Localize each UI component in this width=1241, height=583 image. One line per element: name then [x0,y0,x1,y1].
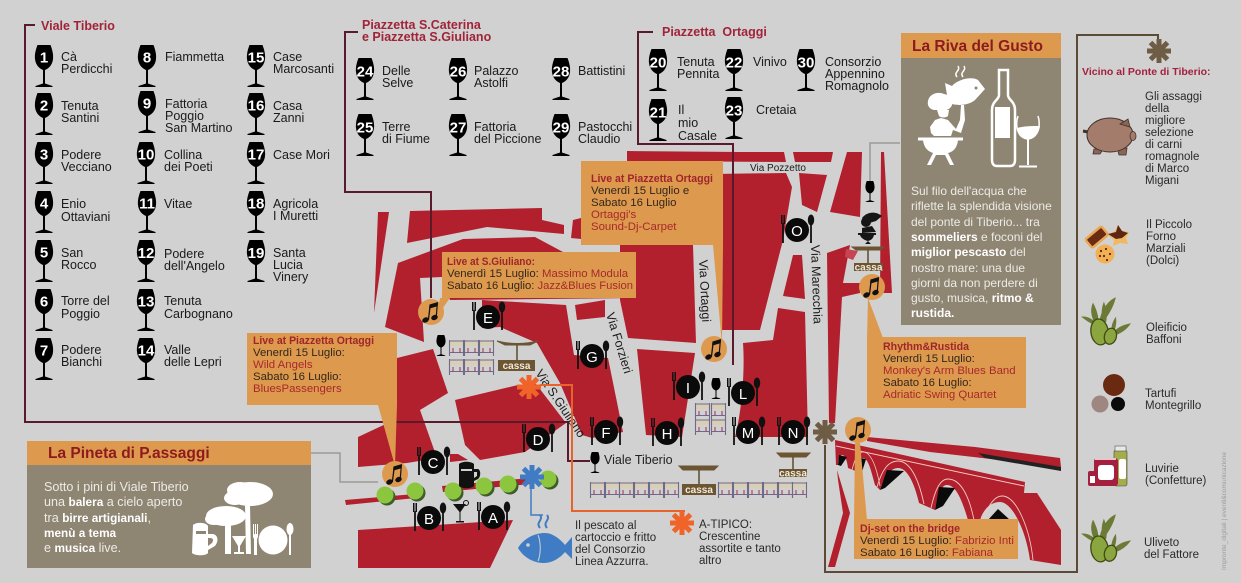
text: Uliveto del Fattore [1144,537,1199,561]
text: Il pescato al cartoccio: Il pescato al [575,520,636,532]
wine list: Viale Tiberio: Podere [61,148,101,162]
callout: Live at S.Giuliano [437,252,636,316]
callout: Live at Piazzetta Ortaggi top: Sound-Dj-Carpet [591,221,677,233]
wine list: Viale Tiberio: I Muretti [273,209,318,223]
wine list: Viale Tiberio: 18 [248,196,264,212]
wine list: Piazzetta Ortaggi [649,49,889,143]
icon: fish with steam [518,515,572,563]
callout: Dj-set on the bridge [854,443,1018,559]
wine list: Viale Tiberio: Torre del [61,294,110,308]
wine list: Viale Tiberio: Enio [61,197,86,211]
restaurant marker E [472,302,505,330]
music icon S.Giuliano [418,299,444,325]
cassa Viale Tiberio: cassa [685,485,713,496]
text: Oleificio Baffoni: Oleificio [1146,322,1187,334]
wine list: Piazzetta S.Caterina: 28 [553,64,569,80]
street label: Via S.Giuliano: Via S.Giuliano [533,367,588,440]
music icon bridge [845,417,871,443]
text: Il pescato al cartoccio: cartoccio e fritto [575,532,656,544]
restaurant marker M [732,416,765,445]
callout: Live at Piazzetta Ortaggi left: Venerdì 15 Luglio: [253,347,345,359]
text: Il Piccolo Forno [1146,219,1192,267]
wine list: Viale Tiberio: 6 [40,294,48,310]
text: Il Piccolo Forno: Marziali [1146,243,1186,255]
text: Tartufi Montegrillo: Tartufi [1145,388,1176,400]
wine list: Piazzetta Ortaggi: Consorzio [825,55,881,69]
wine list: Viale Tiberio: Santini [61,111,99,125]
wine list: Viale Tiberio: Casa [273,99,302,113]
text: A-TIPICO: Crescentine [699,531,760,543]
text: La Riva description: rustida. [911,306,954,320]
wine list: Viale Tiberio: Marcosanti [273,62,334,76]
text: A-TIPICO: A-TIPICO: [699,519,752,531]
text: Uliveto del Fattore: del Fattore [1144,549,1199,561]
icon: star top right [1147,39,1171,63]
icon: blue star [520,465,544,489]
wine list: Viale Tiberio: 8 [143,50,151,66]
text: Oleificio Baffoni [1146,322,1187,346]
text: Pineta description [44,480,189,555]
restaurant marker F: F [601,425,611,442]
wine list: Viale Tiberio: Tenuta [164,294,202,308]
icon: pines, beer, plate [192,482,294,555]
brown bracket: Vicino al Ponte [825,35,1158,572]
connector: La Pineta to map [311,453,378,482]
cassa near E: cassa [503,361,531,372]
icon: olives [1081,297,1131,346]
small wine glass Viale Tiberio [590,452,600,473]
wine list: Viale Tiberio: Podere [164,247,204,261]
wine list: Viale Tiberio: Ottaviani [61,210,110,224]
callout: Live at Piazzetta Ortaggi top: Sabato 16 Luglio [591,197,677,209]
wine list: Piazzetta S.Caterina: Pastocchi [578,120,632,134]
wine list: Piazzetta Ortaggi: 20 [650,54,666,72]
text: Pineta description: e musica live. [44,541,121,555]
text: La Riva description [911,184,1052,320]
wine list: Viale Tiberio: dell'Angelo [164,259,225,273]
street label: Via Forzieri: Via Forzieri [603,311,635,375]
callout: Dj-set on the bridge: Dj-set on the bridge [860,523,960,535]
wine list: Viale Tiberio: Tenuta [61,99,99,113]
wine list: Piazzetta Ortaggi: Pennita [677,67,719,81]
wine list: Piazzetta S.Caterina: Palazzo [474,64,519,78]
heading: Piazzetta S.Caterina bracket: e Piazzetta S.Giuliano [362,30,492,44]
restaurant marker L [728,378,760,406]
restaurant marker D [522,424,555,452]
wine list: Piazzetta S.Caterina [356,58,632,156]
restaurant marker G [576,340,609,369]
text: Il Piccolo Forno: (Dolci) [1146,255,1179,267]
text: Migani: selezione [1145,127,1194,139]
connector: blue line to fish [531,487,543,515]
wine list: Viale Tiberio: 10 [138,146,154,164]
text: La Riva description: nostro mare: una due [911,261,1025,275]
wine list: Piazzetta Ortaggi: 21 [650,104,666,122]
heading: Piazzetta Ortaggi bracket: Piazzetta Ortaggi [662,25,767,39]
text: Il pescato al cartoccio: del Consorzio [575,544,645,556]
street label: Via Pozzetto: Via Pozzetto [750,163,806,174]
music icon Ortaggi [701,336,727,362]
text: A-TIPICO: altro [699,555,721,567]
wine list: Viale Tiberio: Agricola [273,197,318,211]
callout: Live at Piazzetta Ortaggi top: Ortaggi's [591,209,637,221]
restaurant marker B: B [424,511,434,528]
wine list: Viale Tiberio: Case Mori [273,148,330,162]
callout: Live at Piazzetta Ortaggi left: BluesPassengers [253,383,342,395]
wine list: Viale Tiberio: Poggio [165,109,204,123]
restaurant marker H: H [662,426,672,443]
wine list: Piazzetta Ortaggi: 23 [726,102,742,120]
wine list: Viale Tiberio: Zanni [273,111,304,125]
heading: Piazzetta S.Caterina bracket [345,18,492,298]
small wine glass E [436,335,446,356]
wine list: Viale Tiberio: Poggio [61,307,100,321]
wine list: Piazzetta S.Caterina: del Piccione [474,132,541,146]
callout: Live at S.Giuliano: Venerdì 15 Luglio: Massimo Modula [447,268,629,280]
text: La Riva description: gusto, musica, ritmo & [911,291,1034,305]
callout: Live at Piazzetta Ortaggi top: Live at Piazzetta Ortaggi [591,173,713,185]
restaurant marker A: A [488,510,498,527]
street label: Via Ortaggi: Via Ortaggi [696,259,713,322]
text: La Riva description: sommeliers e foconi del [911,230,1042,244]
text: Tartufi Montegrillo [1145,388,1201,412]
wine list: Viale Tiberio: 3 [40,146,48,164]
callout: Live at Piazzetta Ortaggi left: Live at Piazzetta Ortaggi [253,335,374,347]
text: Pineta description: tra birre artigianali, [44,511,151,525]
text: La Riva description: miglior pescasto del [911,245,1026,259]
wine list: Piazzetta Ortaggi: 22 [726,54,742,72]
wine list: Piazzetta S.Caterina: 27 [450,120,466,136]
wine list: Viale Tiberio: Collina [164,148,202,162]
wine list: Viale Tiberio: Rocco [61,258,96,272]
wine list: Viale Tiberio: 17 [248,146,264,164]
cassa Viale Tiberio [679,466,718,496]
restaurant marker I [672,372,705,400]
text: Migani: migliore [1145,115,1185,127]
wine list: Piazzetta S.Caterina: 25 [357,120,373,136]
callout: Live at Piazzetta Ortaggi left: Sabato 16 Luglio: [253,371,342,383]
text: Pineta description: menù a tema [44,526,117,540]
restaurant marker C: C [428,455,439,472]
text: Migani [1145,91,1202,187]
wine list: Viale Tiberio: 13 [138,294,154,310]
text: Migani: romagnole [1145,151,1199,163]
text: Migani: di Marco [1145,163,1189,175]
wine list: Piazzetta S.Caterina: di Fiume [382,132,430,146]
connector: La Riva to map [870,143,900,182]
callout: Live at Piazzetta Ortaggi left [247,333,397,466]
wine list: Viale Tiberio: 9 [143,96,151,112]
wine list: Viale Tiberio: Carbognano [164,307,233,321]
cassa near E [497,341,538,372]
street map [345,151,892,568]
wine list: Piazzetta Ortaggi: Romagnolo [825,79,889,93]
icon: martini glass [453,500,468,522]
text: Pineta description: una balera a cielo aperto [44,495,182,509]
wine list: Piazzetta S.Caterina: 24 [357,64,374,80]
restaurant marker L: L [739,386,747,403]
icon: orange star A-TIPICO [670,511,694,535]
text: Oleificio Baffoni: Baffoni [1146,334,1182,346]
connector: orange line [540,385,685,511]
wine list: Viale Tiberio: Lucia [273,258,303,272]
wine list: Viale Tiberio: Valle [164,343,191,357]
icon: small red tables Riva [845,249,858,260]
restaurant marker I: I [686,380,690,397]
restaurant marker E: E [483,310,493,327]
wine list: Viale Tiberio: Santa [273,246,306,260]
callout: Live at S.Giuliano: Live at S.Giuliano: [447,256,535,268]
panel: La Riva del Gusto: La Riva del Gusto [912,38,1043,55]
callout: Rhythm&Rustida: Venerdì 15 Luglio: [883,353,975,365]
music icon Pineta [382,461,408,487]
text: Uliveto del Fattore: Uliveto [1144,537,1179,549]
restaurant marker F [590,416,623,445]
text: Pineta description: Sotto i pini di Viale Tiberio [44,480,189,494]
wine list: Piazzetta Ortaggi: Cretaia [756,103,796,117]
text: A-TIPICO [699,519,781,567]
wine list: Piazzetta Ortaggi: Vinivo [753,55,787,69]
text: Il Piccolo Forno: Forno [1146,231,1176,243]
wine list: Viale Tiberio: 4 [40,196,49,212]
wine list: Piazzetta Ortaggi: Casale [678,129,717,143]
wine list: Viale Tiberio: 11 [139,196,155,212]
wine list: Piazzetta Ortaggi: Appennino [825,67,885,81]
cassa Riva [852,247,884,274]
callout: Rhythm&Rustida: Monkey's Arm Blues Band [883,365,1016,377]
wine list: Viale Tiberio [35,45,334,380]
wine list: Viale Tiberio: 5 [40,244,48,262]
callout: Live at Piazzetta Ortaggi left: Wild Angels [253,359,313,371]
text: Luvirie [1145,463,1207,487]
callout: Rhythm&Rustida: Sabato 16 Luglio: [883,377,972,389]
icon: star near bridge [813,420,837,444]
callout: Rhythm&Rustida: Adriatic Swing Quartet [883,389,997,401]
icon: wine glass [1017,116,1040,166]
credit vertical: Impronte_digitali | eventi&comunicazione [1221,452,1228,570]
music icon Rhythm [859,274,885,300]
wine list: Piazzetta Ortaggi: mio [678,116,698,130]
wine list: Viale Tiberio: 12 [138,245,154,262]
wine list: Piazzetta Ortaggi: 30 [798,54,814,72]
wine list: Viale Tiberio: 15 [248,50,264,66]
wine list: Piazzetta S.Caterina: Claudio [578,132,620,146]
wine list: Viale Tiberio: Vecciano [61,160,112,174]
panel: La Riva del Gusto [901,33,1061,325]
wine list: Viale Tiberio: Vitae [164,197,192,211]
cassa east: cassa [779,468,807,480]
wine list: Viale Tiberio: 19 [248,245,264,262]
callout: Live at S.Giuliano: Sabato 16 Luglio: Jazz&Blues Fusion [447,280,633,292]
text: Migani: Migani [1145,175,1179,187]
text: A-TIPICO: assortite e tanto [699,543,781,555]
text: Il pescato al cartoccio [575,520,656,568]
restaurant marker C [418,446,450,475]
wine list: Piazzetta S.Caterina: Battistini [578,64,625,78]
wine list: Piazzetta S.Caterina: Fattoria [474,120,516,134]
callout: Dj-set on the bridge: Sabato 16 Luglio: Fabiana [860,547,994,559]
icon: olives 2 [1081,514,1131,563]
wine list: Viale Tiberio: 7 [40,342,48,360]
wine list: Viale Tiberio: 14 [138,342,155,360]
wine list: Viale Tiberio: Perdicchi [61,62,112,76]
heading: Viale Tiberio bracket: Viale Tiberio [41,19,115,33]
wine list: Viale Tiberio: Cà [61,50,77,64]
panel: La Pineta di P.assaggi [27,441,311,568]
callout: Rhythm&Rustida [867,298,1026,408]
street label: Via Marecchia: Via Marecchia [808,245,825,324]
wine list: Viale Tiberio: 1 [40,50,48,66]
wine list: Piazzetta S.Caterina: Delle [382,64,411,78]
icon: beer mug [459,462,480,488]
restaurant marker G: G [586,349,598,366]
text: Migani: di carni [1145,139,1182,151]
wine list: Viale Tiberio: Fattoria [165,97,207,111]
icon: wine bottle [992,70,1015,166]
icon: jam jars [1088,446,1127,486]
text: Tartufi Montegrillo: Montegrillo [1145,400,1201,412]
callout: Live at Piazzetta Ortaggi top [581,161,723,345]
wine list: Piazzetta Ortaggi: Tenuta [677,55,715,69]
heading: Vicino al Ponte di Tiberio: Vicino al Ponte di Tiberio: [1082,66,1211,78]
wine list: Viale Tiberio: delle Lepri [164,355,222,369]
callout: Dj-set on the bridge: Venerdì 15 Luglio: Fabrizio Inti [860,535,1014,547]
tables near E [449,340,494,375]
callout: Rhythm&Rustida: Rhythm&Rustida [883,341,970,353]
restaurant marker O: O [791,223,803,240]
icon: chef grilling fish [918,66,985,165]
wine list: Viale Tiberio: 2 [40,98,48,114]
wine list: Viale Tiberio: dei Poeti [164,160,213,174]
cassa Riva: cassa [855,262,883,274]
restaurant marker M: M [742,425,754,442]
heading: Piazzetta Ortaggi bracket [638,25,767,365]
wine list: Piazzetta S.Caterina: 26 [450,64,466,80]
bridge pink line details [836,446,1033,560]
text: La Riva description: giorni da non perdere di [911,276,1038,290]
text: Il Piccolo Forno: Il Piccolo [1146,219,1192,231]
text: Migani: Gli assaggi [1145,91,1202,103]
wine list: Viale Tiberio: Case [273,50,302,64]
panel: La Pineta di P.assaggi: La Pineta di P.assaggi [48,445,210,462]
tables centre [695,403,726,435]
bridge illustration [835,437,1061,565]
restaurant marker B [414,502,446,531]
label: Viale Tiberio: Viale Tiberio [604,453,673,467]
text: Luvirie: (Confetture) [1145,475,1207,487]
icon: pig [1083,118,1136,155]
callout: Live at Piazzetta Ortaggi top: Venerdì 15 Luglio e [591,185,689,197]
text: La Riva description: Sul filo dell'acqua che [911,184,1027,198]
tables Viale Tiberio left [590,482,679,498]
small wine glass I-L [711,378,721,399]
icon: truffles [1092,374,1125,412]
wine list: Piazzetta Ortaggi: Il [678,103,684,117]
icon: small chef Riva [858,213,882,244]
restaurant marker A [478,502,510,530]
wine list: Viale Tiberio: 16 [248,98,264,114]
icon: biscuits [1085,225,1129,264]
wine list: Piazzetta S.Caterina: Terre [382,120,411,134]
text: Migani: della [1145,103,1170,115]
tables Viale Tiberio right [718,482,807,498]
wine list: Piazzetta S.Caterina: 29 [553,120,569,136]
text: La Riva description: del ponte di Tiberio... tra [911,215,1040,229]
text: La Riva description: riflette la splendida visione [911,199,1052,213]
text: Luvirie: Luvirie [1145,463,1179,475]
restaurant marker N: N [788,425,798,442]
wine list: Viale Tiberio: Vinery [273,270,309,284]
cassa east [777,453,810,480]
small wine glass Riva [865,181,875,202]
wine list: Viale Tiberio: Podere [61,343,101,357]
restaurant marker D: D [533,432,544,449]
wine list: Piazzetta S.Caterina: Astolfi [474,76,508,90]
heading: Piazzetta S.Caterina bracket: Piazzetta S.Caterina [362,18,482,32]
pines row [376,470,558,506]
wine list: Viale Tiberio: San Martino [165,121,232,135]
icon: orange star [517,375,541,399]
wine list: Viale Tiberio: Fiammetta [165,50,224,64]
wine list: Piazzetta S.Caterina: Selve [382,76,413,90]
restaurant marker N [778,416,810,445]
restaurant marker O [782,214,814,243]
wine list: Viale Tiberio: San [61,246,83,260]
wine list: Viale Tiberio: Bianchi [61,355,102,369]
restaurant marker H [652,418,684,446]
text: Il pescato al cartoccio: Linea Azzurra. [575,556,649,568]
